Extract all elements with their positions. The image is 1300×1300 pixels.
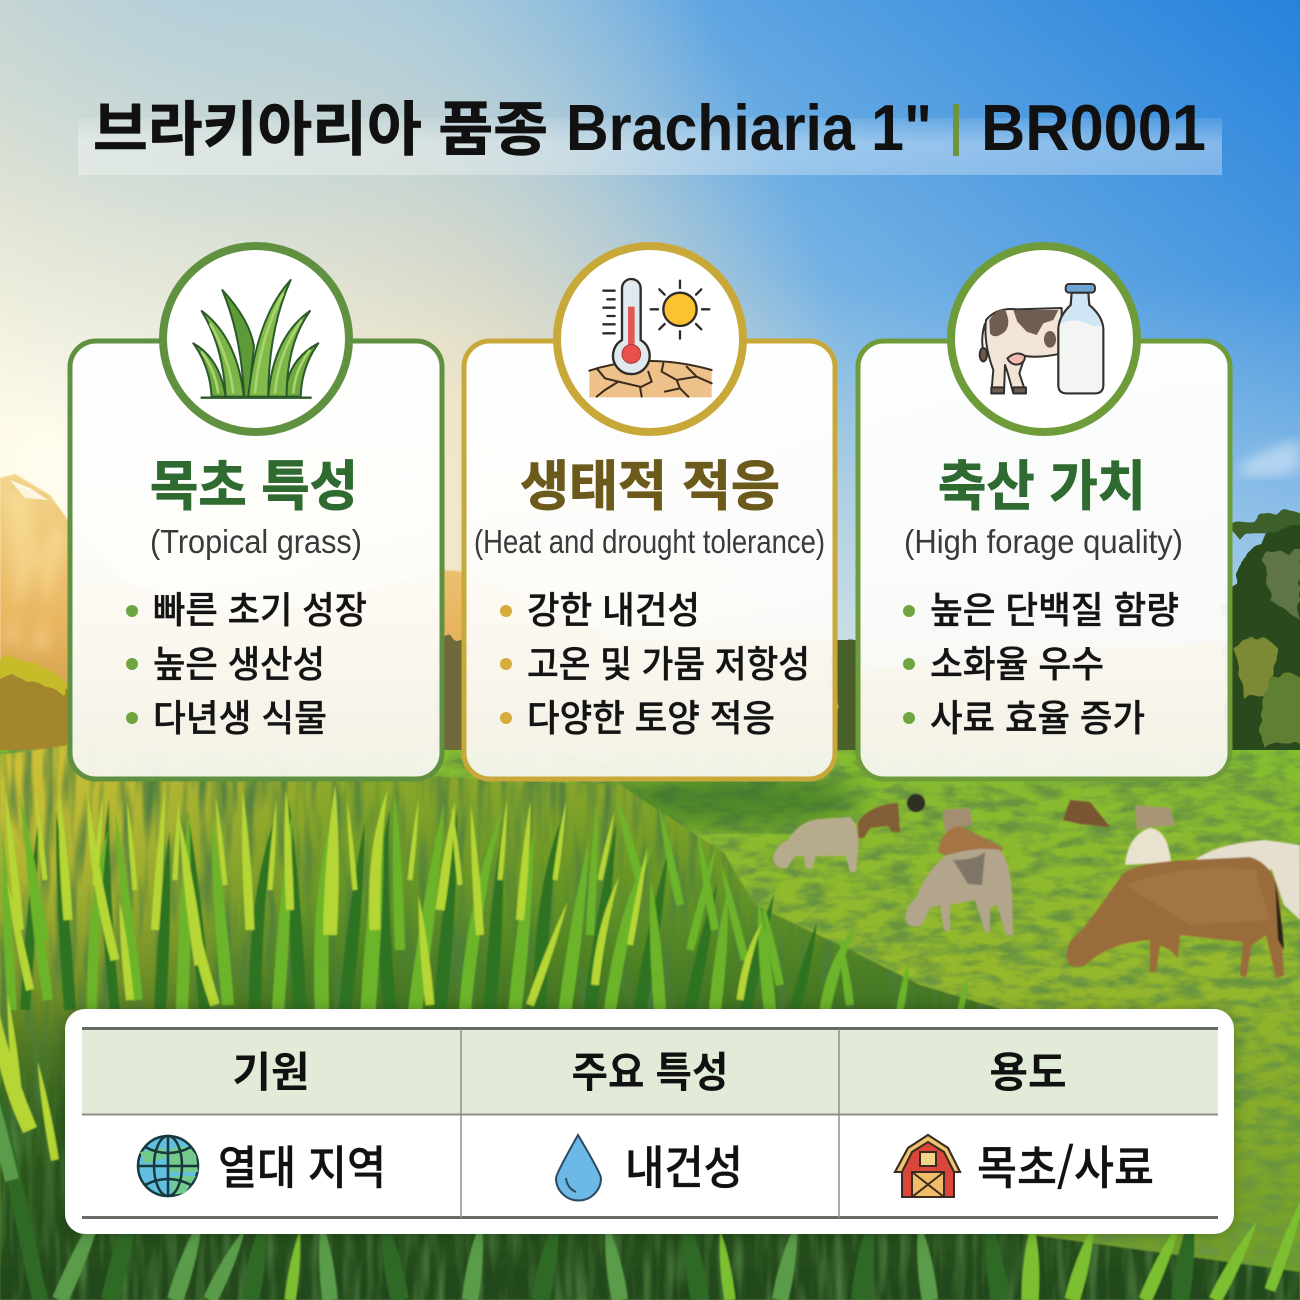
origin value: 열대 지역 <box>218 1132 386 1198</box>
heading: 목초 특성 <box>150 442 358 521</box>
title backing band <box>78 118 1222 175</box>
background: grass below table <box>0 992 1300 1300</box>
subheading: (High forage quality) <box>904 523 1183 560</box>
bullet list: 고온 및 가뭄 저항성 <box>527 634 810 688</box>
bullet list: 높은 생산성 <box>153 634 325 688</box>
icon: water drop <box>556 1135 601 1200</box>
column headers: 용도 <box>989 1039 1067 1100</box>
subheading: (Tropical grass) <box>150 523 362 560</box>
heading: 생태적 적응 <box>520 442 780 521</box>
summary table <box>65 1009 1234 1234</box>
icon: grass <box>163 246 349 432</box>
bullet list: 강한 내건성 <box>527 580 700 634</box>
bullet list <box>126 580 367 742</box>
bullet list: 높은 단백질 함량 <box>930 580 1179 634</box>
title code: BR0001 <box>981 91 1206 164</box>
icon: cow and milk bottle <box>951 246 1137 432</box>
background: sunrise sky <box>0 0 1300 800</box>
column headers <box>232 1039 1067 1100</box>
bullet list: 다양한 토양 적응 <box>527 688 775 742</box>
title <box>78 82 1222 175</box>
heading: 축산 가치 <box>938 442 1146 521</box>
title divider <box>953 104 959 156</box>
background: sunlit meadow <box>0 750 1300 1300</box>
bullet list <box>500 580 810 742</box>
column headers: 주요 특성 <box>572 1039 728 1100</box>
panel: ecological adaptation <box>464 246 835 779</box>
icon: barn <box>895 1135 960 1197</box>
background: foreground tall grass <box>0 745 1300 1300</box>
subheading: (Heat and drought tolerance) <box>474 523 825 560</box>
bullet list: 다년생 식물 <box>153 688 327 742</box>
panel: livestock value <box>858 246 1230 779</box>
bullet list <box>903 580 1179 742</box>
trait value: 내건성 <box>625 1132 743 1198</box>
background: hills and tree line <box>0 474 1300 780</box>
bullet list: 소화율 우수 <box>930 634 1104 688</box>
icon: thermometer, sun and cracked soil <box>557 246 743 432</box>
column headers: 기원 <box>232 1039 310 1100</box>
use value: 목초/사료 <box>977 1132 1154 1198</box>
title: Brachiaria 1" <box>566 91 932 164</box>
background: grazing cows <box>773 794 1300 978</box>
icon: globe <box>138 1136 198 1196</box>
bullet list: 빠른 초기 성장 <box>153 580 367 634</box>
bullet list: 사료 효율 증가 <box>930 688 1145 742</box>
title: Korean and English name: 브라키아리아 품종 <box>93 82 548 167</box>
panel: forage traits <box>70 246 442 779</box>
